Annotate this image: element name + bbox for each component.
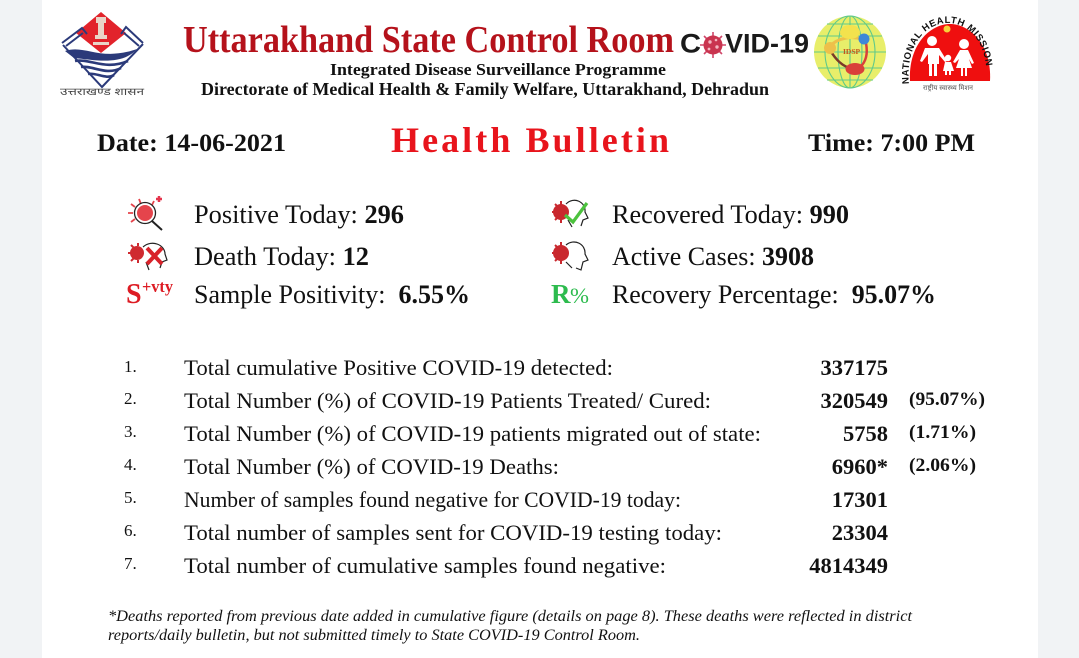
table row 4: (2.06%) xyxy=(909,456,976,476)
logo: COVID-19 xyxy=(680,28,809,58)
table row 7: 7. xyxy=(124,554,137,573)
logo: National Health Mission: राष्ट्रीय स्वास्थ्य मिशन xyxy=(923,83,973,92)
table row 3: 3. xyxy=(124,422,137,441)
logo: National Health Mission: NATIONAL HEALTH MISSION xyxy=(902,16,992,84)
table row 4: Total Number (%) of COVID-19 Deaths: xyxy=(184,454,559,479)
stat: positive today: Positive Today: 296 xyxy=(194,199,404,229)
table row 1 xyxy=(124,355,888,380)
table row 4 xyxy=(124,454,976,479)
stat: sample positivity: Sample Positivity: 6.55% xyxy=(194,279,470,309)
subtitle: programme: Integrated Disease Surveillance Programme xyxy=(330,60,666,79)
logo: Uttarakhand government emblem xyxy=(60,12,145,98)
icon: recovery percentage: % xyxy=(570,283,589,308)
table row 4: 6960* xyxy=(832,454,888,479)
table row 3: Total Number (%) of COVID-19 patients migrated out of state: xyxy=(184,421,761,446)
icon: sample positivity xyxy=(126,277,173,310)
logo: COVID-19: C xyxy=(680,28,701,58)
table row 2: Total Number (%) of COVID-19 Patients Treated/ Cured: xyxy=(184,388,711,413)
table row 3: (1.71%) xyxy=(909,423,976,443)
table row 5 xyxy=(124,487,888,512)
table row 2: (95.07%) xyxy=(909,390,985,410)
table row 1: Total cumulative Positive COVID-19 detected: xyxy=(184,355,613,380)
icon: recovery percentage: R xyxy=(551,279,571,309)
logo: IDSP globe xyxy=(814,16,886,88)
table row 2: 2. xyxy=(124,389,137,408)
table row 1: 337175 xyxy=(820,355,888,380)
footnote xyxy=(108,608,913,644)
icon: recovered today xyxy=(552,200,588,227)
table row 2: 320549 xyxy=(820,388,888,413)
table row 5: 5. xyxy=(124,488,137,507)
heading: Health Bulletin: Health Bulletin xyxy=(391,120,669,160)
table row 3 xyxy=(124,421,976,446)
table row 3: 5758 xyxy=(843,421,888,446)
stat: recovery percentage: Recovery Percentage: 95.07% xyxy=(612,279,936,309)
table row 7: Total number of cumulative samples found negative: xyxy=(184,553,666,578)
logo: Uttarakhand government emblem: उत्तराखण्ड शासन xyxy=(60,87,145,98)
icon: recovery percentage xyxy=(551,279,589,309)
stat: death today: Death Today: 12 xyxy=(194,241,369,271)
table row 1: 1. xyxy=(124,357,137,376)
icon: death today xyxy=(128,243,167,270)
icon: active cases xyxy=(552,242,588,270)
title: Uttarakhand State Control Room xyxy=(183,19,674,61)
table row 7 xyxy=(124,553,888,578)
subtitle: directorate: Directorate of Medical Health & Family Welfare, Uttarakhand, Dehradun xyxy=(201,79,769,99)
date: Date: 14-06-2021 xyxy=(97,130,286,157)
table row 4: 4. xyxy=(124,455,137,474)
icon: sample positivity: S xyxy=(126,279,142,310)
table row 7: 4814349 xyxy=(809,553,888,578)
table row 5: 17301 xyxy=(832,487,888,512)
footnote: reports/daily bulletin, but not submitted timely to State COVID-19 Control Room. xyxy=(108,627,640,644)
logo: IDSP globe: IDSP xyxy=(843,47,861,56)
table row 6: 6. xyxy=(124,521,137,540)
stat: recovered today: Recovered Today: 990 xyxy=(612,199,849,229)
table row 6 xyxy=(124,520,888,545)
logo: COVID-19: VID-19 xyxy=(725,28,809,58)
time: Time: 7:00 PM xyxy=(808,130,975,157)
stat: active cases: Active Cases: 3908 xyxy=(612,241,814,271)
table row 2 xyxy=(124,388,985,413)
table row 6: 23304 xyxy=(832,520,888,545)
table row 6: Total number of samples sent for COVID-19 testing today: xyxy=(184,520,722,545)
table row 5: Number of samples found negative for COVID-19 today: xyxy=(184,487,681,512)
icon: sample positivity: +vty xyxy=(142,277,173,296)
icon: positive today xyxy=(128,196,162,230)
footnote: *Deaths reported from previous date added in cumulative figure (details on page 8). These deaths were reflected in district xyxy=(108,608,913,625)
